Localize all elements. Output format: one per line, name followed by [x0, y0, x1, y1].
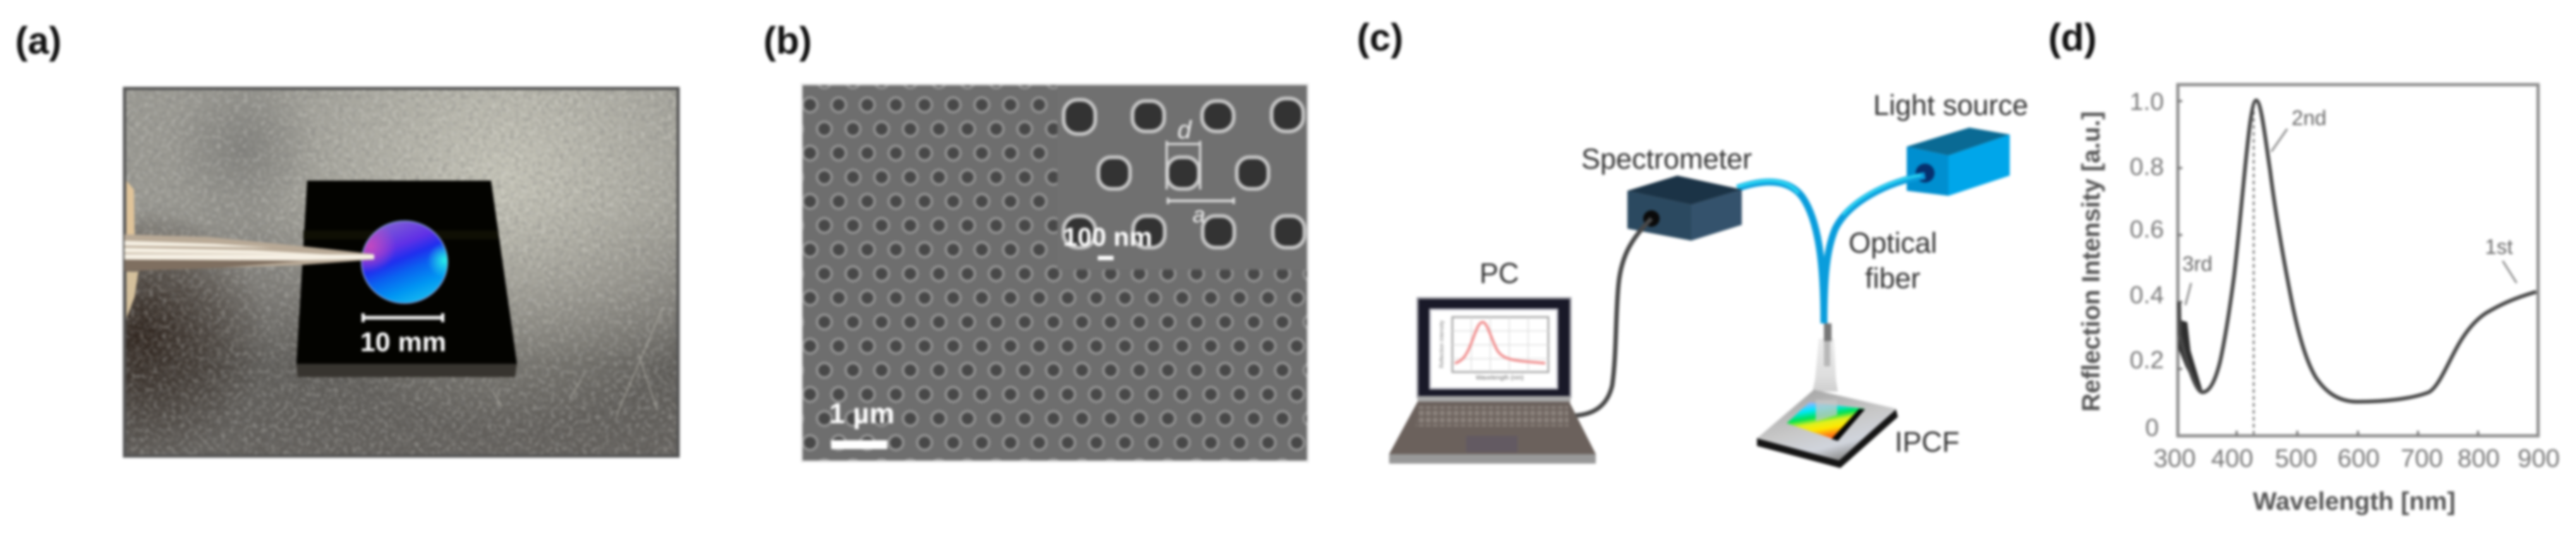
x axis tick labels: 600	[2338, 445, 2379, 472]
icon: IPCF sample on plate	[1757, 390, 1898, 468]
data cable	[1575, 219, 1651, 416]
mini spectrum chart on screen: Reflection intensity	[1438, 320, 1445, 368]
annotation: 1st peak	[2485, 235, 2517, 283]
hole lattice	[803, 85, 1307, 460]
y axis title: Reflection Intensity [a.u.]	[2077, 111, 2105, 412]
panel label (a): (a)	[15, 20, 61, 62]
noisy start of spectrum	[2178, 319, 2203, 393]
x axis tick labels: 800	[2458, 445, 2500, 472]
panel label (d): (d)	[2048, 16, 2097, 59]
dimension a: a	[1193, 201, 1205, 227]
label: optical fiber: fiber	[1865, 262, 1921, 294]
y axis tick labels: 0.6	[2130, 216, 2164, 243]
y axis tick labels: 0.2	[2130, 347, 2164, 374]
icon: light source box	[1907, 128, 2010, 196]
y axis tick labels: 1.0	[2130, 88, 2164, 116]
label: PC: PC	[1479, 257, 1519, 289]
y axis tick labels: 0.4	[2130, 282, 2164, 309]
spectrum curve	[2179, 100, 2536, 402]
scale bar 10 mm: 10 mm	[360, 327, 446, 358]
mini spectrum chart on screen	[1438, 317, 1548, 382]
panel: measurement setup schematic	[1389, 89, 2028, 468]
icon: spectrometer box	[1627, 176, 1742, 241]
icon: laptop PC	[1389, 298, 1596, 464]
peak marker dashed line	[2253, 104, 2254, 436]
dimension d	[1167, 116, 1200, 189]
x axis tick labels: 300	[2154, 445, 2196, 472]
annotation: 1st peak: 1st	[2485, 235, 2513, 258]
annotation: 2nd peak: 2nd	[2292, 106, 2326, 129]
inset scale bar 100 nm: 100 nm	[1063, 222, 1152, 251]
photo background: grey textured surface	[125, 88, 678, 456]
panel: reflection spectrum chart	[2077, 85, 2560, 515]
y axis tick labels: 0.8	[2130, 153, 2164, 181]
panel label (c): (c)	[1357, 16, 1403, 59]
x axis tick labels: 700	[2401, 445, 2443, 472]
magnified inset	[1057, 85, 1307, 270]
scale bar 1 µm: 1 µm	[829, 397, 894, 430]
annotation: 3rd peak: 3rd	[2182, 252, 2213, 275]
label: light source: Light source	[1873, 89, 2028, 121]
y axis tick labels: 0	[2145, 414, 2159, 442]
x axis title: Wavelength [nm]	[2253, 488, 2455, 515]
y axis tick labels	[2130, 88, 2164, 442]
scale bar 1 µm	[829, 397, 894, 449]
wooden stand at left	[126, 181, 138, 319]
label: optical fiber: Optical	[1849, 227, 1937, 259]
dimension d: d	[1177, 116, 1193, 144]
scale bar 10 mm	[360, 313, 446, 358]
panel label (b): (b)	[763, 20, 812, 62]
annotation: 2nd peak	[2271, 106, 2326, 152]
plot frame	[2178, 85, 2538, 436]
x axis tick labels: 500	[2275, 445, 2317, 472]
tweezers	[125, 234, 374, 271]
mini spectrum chart on screen: Wavelength (nm)	[1476, 375, 1524, 382]
label: spectrometer: Spectrometer	[1581, 143, 1752, 175]
black glass substrate	[296, 181, 517, 377]
dimension a	[1168, 198, 1234, 227]
annotation: 3rd peak	[2182, 252, 2213, 305]
x axis tick labels: 400	[2211, 445, 2253, 472]
label: IPCF: IPCF	[1895, 426, 1960, 458]
x axis tick labels: 900	[2518, 445, 2560, 472]
optical fiber	[1737, 175, 1925, 323]
iridescent photonic crystal film disc	[361, 221, 447, 303]
panel: sample photograph	[125, 88, 678, 456]
fiber tip and light beam	[1813, 323, 1838, 392]
panel: SEM micrograph	[801, 83, 1309, 462]
x axis tick labels	[2154, 445, 2560, 472]
